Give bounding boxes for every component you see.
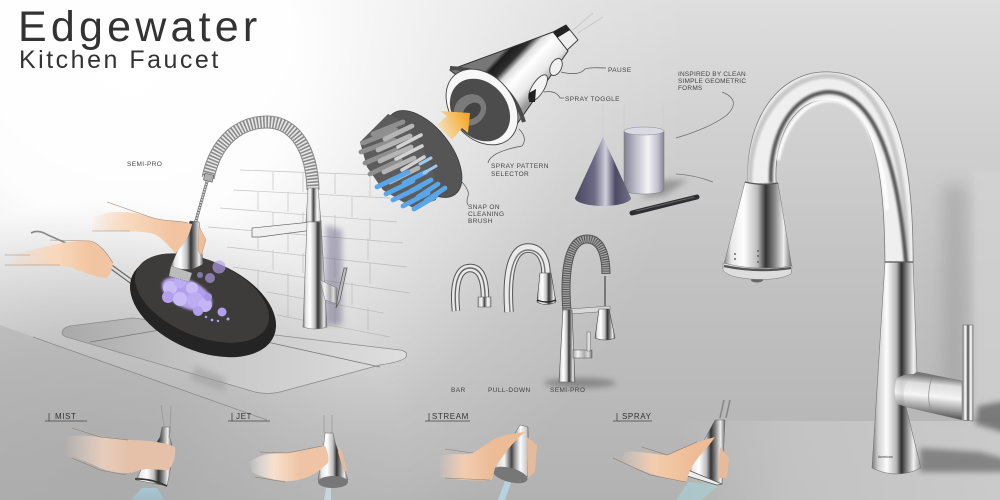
- label: semi-pro: SEMI-PRO: [127, 161, 162, 168]
- head: [135, 427, 172, 486]
- water: [324, 488, 331, 500]
- guide lines: [603, 105, 663, 137]
- spray head in hand: [169, 221, 203, 282]
- note: SIMPLE GEOMETRIC: [678, 78, 746, 85]
- family labels: [451, 387, 585, 394]
- left hand holding pan: [5, 240, 113, 278]
- hub: [895, 372, 962, 420]
- title: Kitchen Faucet: [19, 46, 221, 74]
- panel: exploded spray head: PAUSE: [608, 67, 632, 74]
- spray head collar: [553, 25, 578, 52]
- gooseneck spout: [750, 76, 907, 263]
- family labels: BAR: [451, 387, 466, 394]
- leaders and labels: [460, 68, 606, 205]
- title: [18, 3, 261, 74]
- note: INSPIRED BY CLEAN: [678, 71, 746, 78]
- water: [498, 478, 512, 500]
- panel: exploded spray head: SNAP ON: [468, 204, 500, 211]
- soap bubbles: [157, 260, 230, 322]
- bristle mass: [360, 114, 436, 208]
- logo mark: American: [878, 455, 893, 459]
- panel: faucet family: [451, 239, 616, 394]
- hub front: [894, 374, 932, 412]
- panel: exploded spray head: [360, 13, 632, 225]
- shadow: [544, 378, 616, 388]
- heading: MIST: [55, 412, 77, 421]
- heading: STREAM: [432, 412, 469, 421]
- panel: stream: [425, 412, 537, 500]
- spray head cone: [450, 32, 568, 124]
- spray head face: [431, 55, 533, 159]
- hose lines: [573, 13, 603, 33]
- cleaning brush: [360, 97, 477, 211]
- head buttons: [525, 57, 565, 104]
- head: [687, 420, 725, 485]
- hand: [250, 446, 347, 482]
- right hand holding spray head: [92, 202, 206, 256]
- semi-pro faucet: [195, 122, 347, 329]
- cone: [575, 137, 631, 206]
- family labels: PULL-DOWN: [488, 387, 531, 394]
- cylinder: [624, 127, 664, 194]
- panel: mist: [45, 405, 175, 500]
- water: [676, 482, 718, 500]
- panel: exploded spray head: BRUSH: [468, 218, 493, 225]
- head: [318, 433, 348, 488]
- rod: [632, 197, 697, 213]
- wall shadow: [325, 225, 342, 325]
- pull-down head: [723, 182, 792, 282]
- frying pan: [31, 231, 291, 378]
- orange arrow: [437, 111, 470, 140]
- hand: [66, 428, 175, 475]
- panel: spray: [613, 400, 730, 500]
- sink: [62, 318, 407, 394]
- body: [872, 262, 921, 474]
- family labels: SEMI-PRO: [550, 387, 585, 394]
- head: [491, 425, 529, 486]
- panel: geometric forms: [575, 71, 746, 213]
- heading: JET: [236, 412, 252, 421]
- panel: exploded spray head: SELECTOR: [491, 171, 529, 178]
- pull-down faucet: [508, 248, 556, 312]
- title: Edgewater: [18, 3, 261, 51]
- semi-pro small faucet: [559, 239, 615, 382]
- handle: [963, 325, 973, 421]
- cast shadow: [640, 180, 688, 198]
- note: FORMS: [678, 85, 703, 92]
- brick wall: [208, 170, 410, 337]
- counter shadows: [920, 448, 1000, 472]
- panel: jet: [228, 412, 348, 500]
- panel: exploded spray head: CLEANING: [468, 211, 504, 218]
- panel: exploded spray head: SPRAY TOGGLE: [565, 96, 620, 103]
- water: [131, 488, 165, 500]
- panel: exploded spray head: SPRAY PATTERN: [491, 163, 549, 170]
- counter edge: [33, 337, 267, 420]
- panel: semi-pro scene: [5, 122, 410, 420]
- spring: [208, 122, 313, 190]
- hand: [613, 437, 729, 482]
- heading: SPRAY: [622, 412, 652, 421]
- brush disc: [371, 97, 477, 211]
- bristles: [361, 122, 445, 209]
- bar faucet: [455, 268, 491, 311]
- panel: main faucet: [723, 76, 1000, 474]
- hand: [440, 432, 537, 480]
- note: [676, 71, 746, 182]
